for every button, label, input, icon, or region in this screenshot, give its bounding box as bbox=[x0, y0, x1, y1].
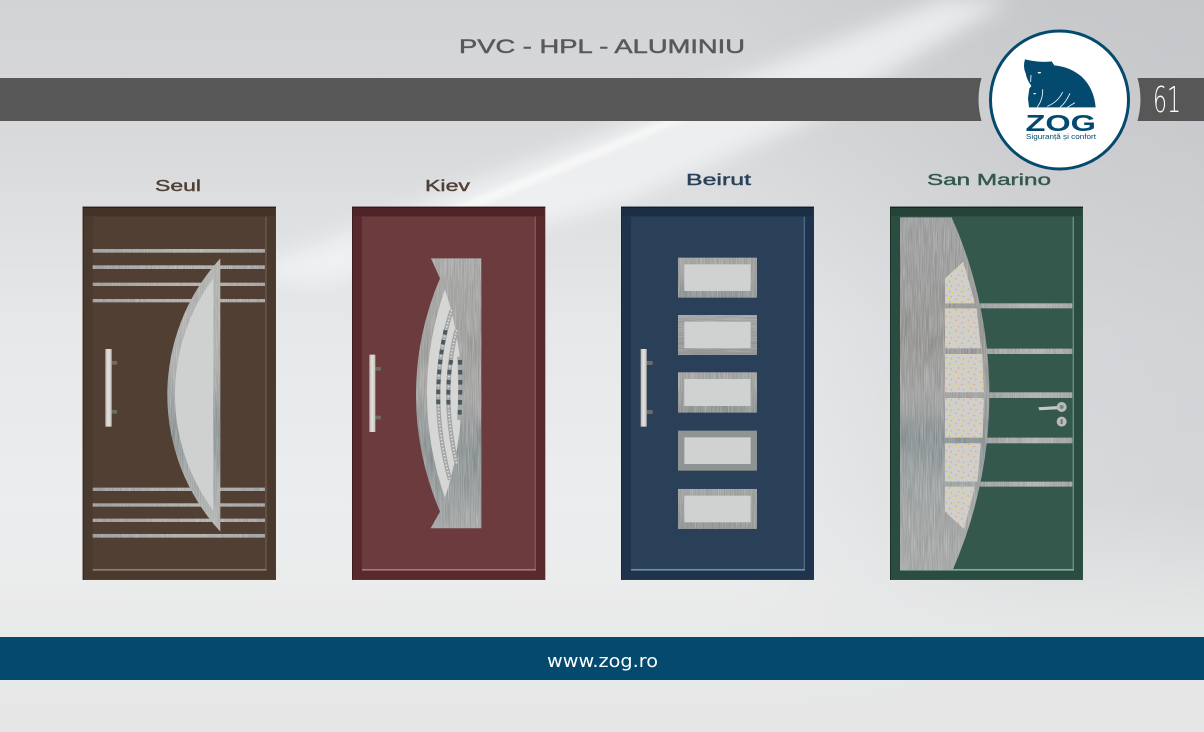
window 2 bbox=[678, 315, 757, 355]
label: Seul: Seul bbox=[155, 178, 201, 195]
lever handle bbox=[1038, 402, 1067, 427]
lens glass bbox=[427, 289, 462, 498]
metal plate bbox=[900, 217, 989, 570]
stainless bars bbox=[93, 249, 265, 538]
logo wordmark: ZOG bbox=[1026, 110, 1096, 136]
label: Beirut: Beirut bbox=[686, 172, 752, 189]
window 3 bbox=[678, 372, 757, 413]
decorative glass bands bbox=[438, 310, 460, 480]
half-moon glass bbox=[175, 278, 213, 511]
page number: 61 bbox=[1153, 80, 1181, 121]
label: San Marino: San Marino bbox=[927, 172, 1051, 189]
stainless bars bbox=[980, 303, 1072, 487]
door frame bbox=[890, 207, 1083, 580]
footer bar bbox=[0, 637, 1204, 680]
glass panels bbox=[945, 262, 984, 529]
door: San Marino bbox=[890, 207, 1083, 580]
metal plate bbox=[416, 258, 481, 528]
header bar left bbox=[0, 78, 982, 121]
handle bbox=[105, 349, 117, 427]
handle bbox=[369, 355, 381, 432]
header bar right bbox=[1138, 78, 1204, 121]
window 4 bbox=[678, 431, 757, 471]
icon: bear bbox=[1024, 59, 1096, 107]
footer url: www.zog.ro bbox=[547, 651, 658, 672]
door: Kiev bbox=[352, 207, 545, 580]
logo tagline: Siguranță și confort bbox=[1026, 134, 1096, 141]
door frame bbox=[352, 207, 545, 580]
handle bbox=[641, 349, 653, 427]
door frame bbox=[83, 207, 276, 580]
window 1 bbox=[678, 258, 757, 298]
door: Beirut bbox=[621, 207, 814, 580]
half-moon metal plate bbox=[167, 258, 220, 532]
logo circle bbox=[990, 31, 1128, 169]
logo bbox=[990, 31, 1128, 169]
label: Kiev: Kiev bbox=[425, 178, 470, 195]
window 5 bbox=[678, 489, 757, 529]
title: PVC - HPL - ALUMINIU bbox=[459, 37, 745, 58]
door frame bbox=[621, 207, 814, 580]
door: Seul bbox=[83, 207, 276, 580]
